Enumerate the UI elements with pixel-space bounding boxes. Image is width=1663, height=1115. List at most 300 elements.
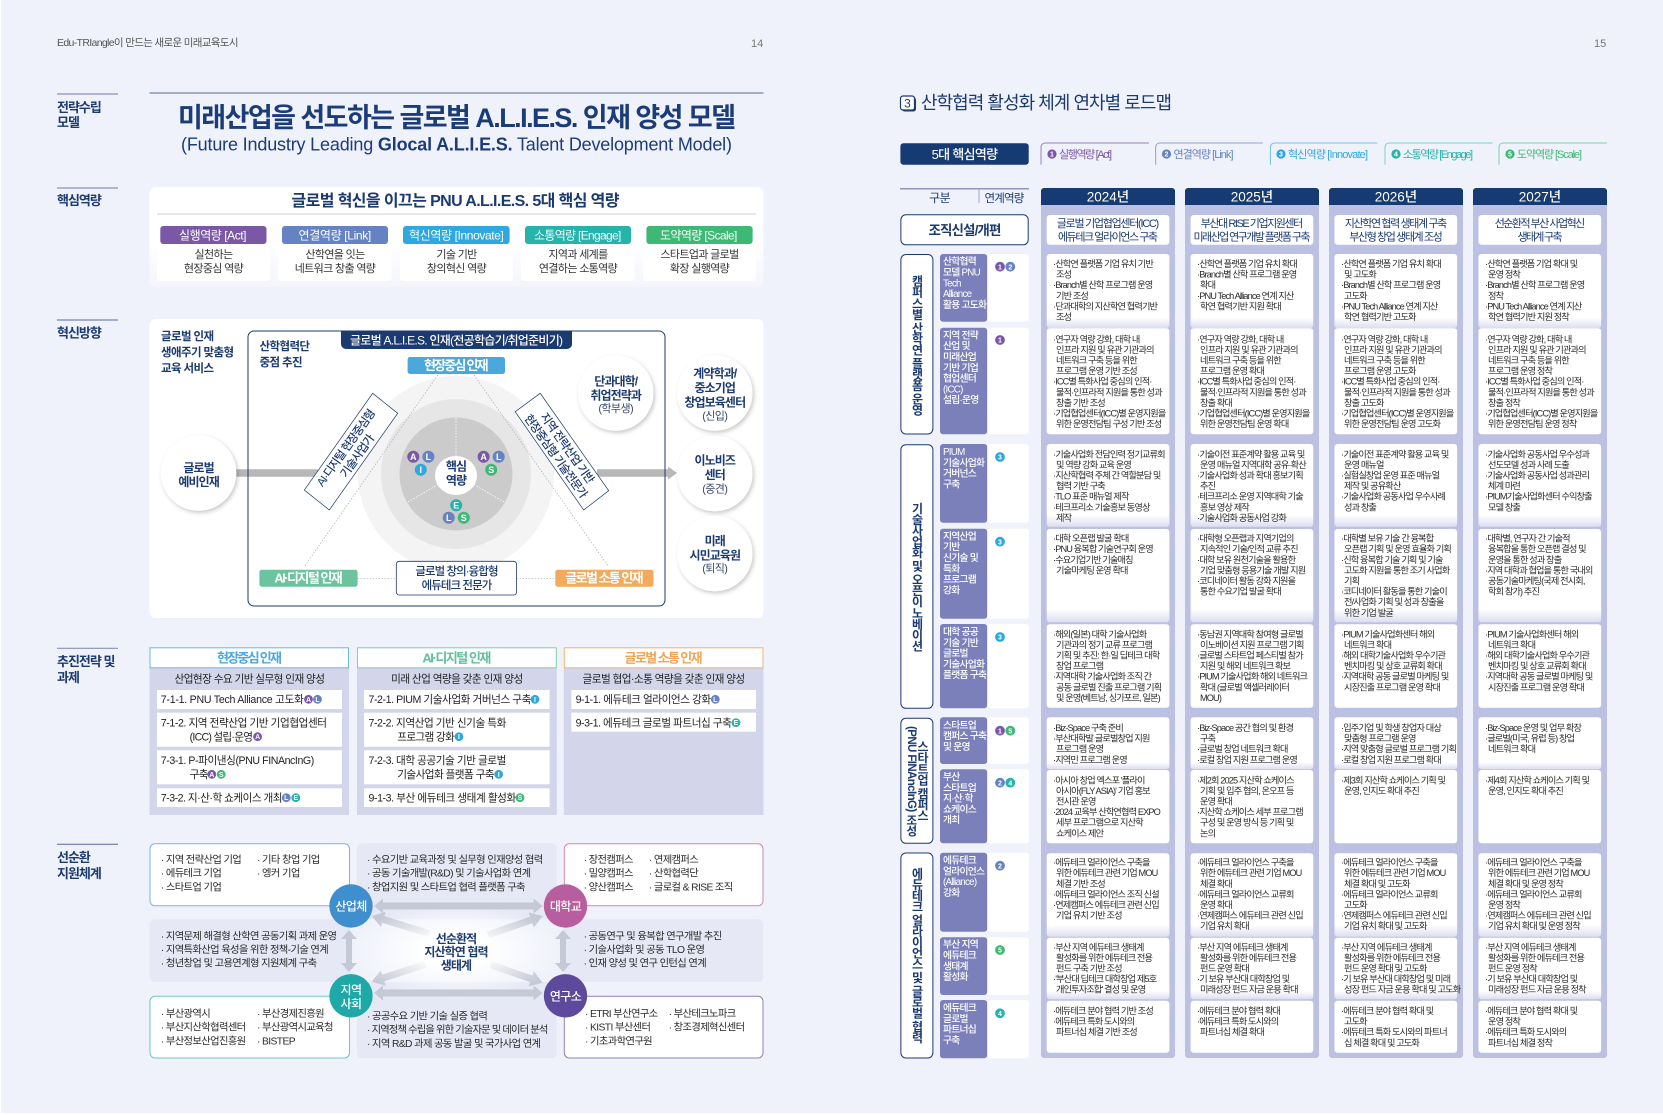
2025 plan [1191,624,1313,708]
task 9-1-3: S [518,795,523,802]
2027 plan: 물적·인프라적 지원을 통한 성과 [1488,386,1595,397]
circle: future citizen education [677,516,752,591]
letter badges: E L S: L [446,513,452,523]
2024 plan: 펀드 구축 기반 조성 [1056,964,1122,974]
box: industry members: · 스타트업 기업 [161,880,221,893]
category label: 구축 [943,1034,960,1046]
2024 plan: ·아시아 창업 엑스포 '플라이 [1053,775,1145,785]
2025 plan: ·PIUM 기술사업화 해외 네트워크 [1197,671,1308,682]
2025 plan: ·산학연 플랫폼 기업 유치 확대 [1197,259,1297,269]
flow arrow [236,469,318,477]
group: campus platform [901,254,933,434]
category label: 글로벌 [943,1013,969,1025]
2024 organisation: 글로벌 기업협업센터(ICC) [1057,217,1159,230]
pill: field-centred talent: 현장중심 인재 [424,358,489,373]
2025 plan: ·에듀테크 얼라이언스 구축을 [1197,858,1294,868]
2027 plan: ·에듀테크 얼라이언스 교류회 [1485,888,1582,899]
2027 plan: 위한 운영전담팀 운영 정착 [1488,418,1578,429]
2026 plan: 네트워크 구축 등을 위한 [1344,356,1426,366]
2026 plan: 학연 협력기반 고도화 [1344,311,1417,322]
task 7-2-3 [364,750,550,784]
box: university members: · 글로컬 & RISE 조직 [649,880,733,893]
task 7-1-2: A [255,734,260,741]
2026 plan: ·기 보유 부산대 대학창업 및 미래 [1341,973,1451,984]
2025 plan: ·대학형 오픈랩과 지역기업의 [1197,534,1294,544]
2025 plan: ·ICC별 특화사업 중심의 인적· [1197,376,1295,387]
panel: five core competencies [150,187,764,287]
category label: 플랫폼 구축 [943,669,987,681]
2026 plan: 십 체결 확대 및 고도화 [1344,1037,1420,1048]
table header: category: 연계역량 [984,192,1025,205]
2025 plan: 활성화를 위한 에듀테크 전용 [1200,952,1296,963]
circle: contract departments: 창업보육센터 [684,395,745,410]
2025 plan: ·동남권 지역대학 참여형 글로벌 [1197,629,1303,639]
2026 plan: ·Branch별 산학 프로그램 운영 [1341,279,1441,290]
category label: 개최 [943,814,960,826]
2027 plan: ·산학연 플랫폼 기업 확대 및 [1485,259,1577,269]
2025 column [1185,188,1319,1058]
competency: act: 실천하는 [195,247,233,261]
legend: innovate [1270,143,1378,165]
table header: category [900,189,1029,205]
competency badge [995,632,1005,642]
task 7-3-2: L [284,795,289,802]
2025 plan [1191,1001,1313,1053]
2024 plan [1047,444,1169,527]
2024 plan: 쇼케이스 제안 [1056,828,1105,838]
2025 plan: 논의 [1200,828,1216,838]
group: startup campus [901,718,933,843]
group: startup campus: (PNU FINAncInG) 조성 [905,726,917,836]
section label: core competency [57,188,118,208]
circle: innobiz centre [677,436,752,511]
task 7-3-1: 7-3-1. P-파이낸싱(PNU FINAncInG) [161,755,314,767]
2027 plan: 벤치마킹 및 상호 교류회 확대 [1488,660,1586,671]
2027 plan: ·ICC별 특화사업 중심의 인적· [1485,376,1583,387]
2024 plan: 아시아(FLY ASIA)' 기업 홍보 [1056,785,1150,796]
task 7-2-3: 7-2-3. 대학 공공기술 기반 글로벌 [368,755,506,767]
task 9-3-1: E [734,720,739,727]
box: university members: · 밀양캠퍼스 [584,868,633,880]
2027 plan: ·제4회 지산학 쇼케이스 기획 및 [1485,775,1589,785]
text: university-institute links: · 인재 양성 및 연구 인턴십 연계 [584,957,706,969]
2027 plan: 프로그램 운영 정착 [1488,365,1553,376]
circle: contract departments: 계약학과/ [693,367,736,381]
2027 plan: ·Branch별 산학 프로그램 운영 [1485,279,1585,290]
category label: 에듀테크 [943,950,977,962]
circle: global prospective talent [161,435,236,511]
category label: 특화 [943,563,960,575]
2025 plan: ·제2회 2025 지산학 쇼케이스 [1197,775,1294,785]
task 9-1-1: L [713,697,718,704]
2025 plan: 파트너십 체결 확대 [1200,1026,1264,1037]
2027 plan [1478,770,1601,843]
legend heading: 5대 핵심역량 [932,147,998,162]
legend: scale [1499,143,1607,165]
letter badges: A L S [478,451,505,476]
2026 organisation: 지산학연 협력 생태계 구축 [1345,217,1447,230]
box: university members: · 양산캠퍼스 [584,881,633,893]
diagonal card: AI digital entrepreneur: AI·디지털 현장중심형 [314,407,378,489]
competency: scale: 도약역량 [Scale] [660,227,737,242]
2025 plan: 물적·인프라적 지원을 통한 성과 [1200,386,1307,397]
text: university-institute links: · 공동연구 및 융복합 연구개발 추진 [584,932,722,943]
centre caption: 선순환적 [436,932,476,946]
2024 plan: ·지역민 프로그램 운영 [1053,754,1127,765]
box: research institutes [564,996,763,1058]
row: PIUM governance [940,444,1601,527]
2024 plan: ·에듀테크 얼라이언스 조직 신설 [1053,888,1159,899]
letter badges: E L S: S [461,513,467,523]
2026 plan: 기획 [1344,575,1360,586]
2025 plan: 확대 (글로벌 액셀러레이터 [1200,681,1289,692]
task 7-2-1: I [534,697,536,704]
row: ICC centre [940,328,1601,434]
2024 plan: ·에듀테크 특화 도시와의 [1053,1016,1135,1027]
2027 plan: ·PNU Tech Alliance 연계 지산 [1485,300,1583,311]
life-cycle service note: 교육 서비스 [161,362,215,375]
category label: 신기술 및 [943,552,979,564]
2025 organisation: 미래산업 연구개발 플랫폼 구축 [1194,231,1310,244]
2027 plan: ·에듀테크 얼라이언스 구축을 [1485,858,1582,868]
2027 plan: 네트워크 확대 [1488,639,1536,650]
2024 plan: ·ICC별 특화사업 중심의 인적· [1053,376,1151,387]
circle: colleges and careers [578,355,653,431]
concentric core circles [358,376,554,572]
category label [940,853,1029,932]
group: edutech alliance: 에듀테크 얼라이언스 및 글로벌 협력 [910,867,924,1044]
2024 organisation [1047,215,1169,245]
tab: global ALIES talent: 글로벌 A.L.I.E.S. 인재(전공학습기/취업준비기) [350,332,563,348]
2025 plan [1191,938,1313,999]
task 7-2-1 [364,690,550,709]
section label: virtuous cycle support: 선순환 [57,850,91,865]
2025 plan: ·로컬 창업 지원 프로그램 운영 [1197,754,1297,765]
2024 plan: 인프라 지원 및 유관 기관과의 [1056,344,1154,355]
task 9-1-3 [364,788,550,807]
2024 plan: ·2024 교육부 산학연협력 EXPO [1053,806,1161,817]
competency: link: 네트워크 창출 역량 [295,262,376,275]
2026 column: 2026년 [1375,190,1417,204]
box: university members [564,844,763,906]
panel heading: 글로벌 혁신을 이끄는 PNU A.L.I.E.S. 5대 핵심 역량 [292,191,620,210]
legend: link: 2 [1165,152,1169,159]
text: industry-community links: · 지역문제 해결형 산학연 공동기획 과제 운영 [161,932,336,943]
section label: strategy model [57,94,118,130]
2026 plan: ·부산 지역 에듀테크 생태계 [1341,942,1432,952]
2027 plan: 네트워크 확대 [1488,743,1536,754]
letter badges: A L I: I [420,465,422,475]
diagonal card: AI digital entrepreneur [304,393,398,510]
circle: colleges and careers: (학부생) [598,402,633,415]
2025 plan: 통한 수요기업 발굴 확대 [1200,586,1281,597]
task 7-3-1: 구축 [190,769,209,781]
2025 plan: ·지산학 쇼케이스 세부 프로그램 [1197,806,1303,817]
section label: strategy and tasks: 추진전략 및 [57,654,115,669]
2024 plan: ·Branch별 산학 프로그램 운영 [1053,279,1153,290]
2025 plan [1191,717,1313,769]
2027 plan: 파트너십 체결 정착 [1488,1038,1553,1048]
2025 plan: 홍보 영상 제작 [1200,501,1250,512]
category label [940,624,1029,708]
2025 plan: 이노베이션 지원 프로그램 기획 [1200,639,1304,650]
box: industry members: · 엥커 기업 [257,866,300,880]
2025 plan: ·연구자 역량 강화, 대학 내 [1197,334,1283,344]
category label [940,328,1029,434]
task 7-2-2: 프로그램 강화 [397,732,455,744]
2025 organisation [1191,215,1313,245]
letter badges: A L I: A [410,452,417,462]
2024 plan: ·TLO 표준 매뉴얼 제작 [1053,492,1130,502]
category label [940,529,1029,619]
legend: engage [1385,143,1493,165]
centre glow [351,903,561,999]
row: edutech global partnership [940,1000,1601,1058]
two-way arrows [341,898,571,1000]
2027 plan: 공동기술마케팅(국제 전시회, [1488,576,1585,586]
2025 plan: 운영 확대 [1200,796,1232,806]
circle: contract departments [677,355,752,431]
2027 plan: ·기술사업화 공동사업 우수성과 [1485,449,1589,459]
virtuous cycle ecosystem diagram [150,843,764,1058]
letter badges: A L S: A [480,452,487,462]
2027 plan: ·대학별, 연구자 간 기술적 [1485,534,1570,544]
category label [940,937,1029,995]
2026 plan: 창출 고도화 [1344,398,1385,408]
circle: innobiz centre: 센터 [705,468,725,482]
2025 plan: 기업 유치 확대 [1200,920,1249,931]
section label: virtuous cycle support [57,844,118,881]
2024 plan: 및 역량 강화 교육 운영 [1056,459,1131,470]
legend: link: 연결역량 [Link] [1174,148,1234,161]
box: industry members: · 에듀테크 기업 [161,866,221,880]
node: institute [544,974,587,1018]
diagonal card: regional tech expert: 현장중심형 기술전문가 [521,412,591,501]
2026 organisation [1334,215,1457,245]
2026 plan: ·해외 대학기술사업화 우수기관 [1341,650,1447,660]
2024 plan [1047,328,1169,434]
2026 plan [1334,254,1457,328]
section label: innovation direction: 혁신방향 [57,326,102,340]
task 7-3-2: E [293,795,298,802]
2027 plan: ·PIUM 기술사업화센터 해외 [1485,629,1578,639]
task 9-1-1 [571,690,756,709]
node: institute: 연구소 [550,989,582,1003]
legend: scale: 도약역량 [Scale] [1517,147,1582,161]
2027 plan: 체결 확대 및 운영 정착 [1488,878,1564,889]
2024 column: 2024년 [1087,190,1129,204]
task 7-1-1: 7-1-1. PNU Tech Alliance 고도화 [161,694,304,706]
2024 plan: 프로그램 운영 [1056,743,1104,754]
2027 plan: ·연구자 역량 강화, 대학 내 [1485,334,1571,344]
2024 plan: 전시관 운영 [1056,796,1096,806]
2026 plan: 운영, 인지도 확대 추진 [1344,785,1419,796]
2026 plan: ·에듀테크 얼라이언스 교류회 [1341,888,1438,899]
competency: scale: 확장 실행역량 [670,262,730,275]
2026 plan [1334,328,1457,434]
category label [940,769,1029,843]
category label: 거버넌스 [943,468,977,480]
2025 plan: 지속적인 기술/인적 교류 추진 [1200,543,1298,554]
2026 plan: 물적·인프라적 지원을 통한 성과 [1344,386,1451,397]
2026 plan: ·신학 융복합 기술 기획 및 기술 [1341,554,1443,565]
competency badges: 1 [998,264,1002,271]
pill: AI digital talent [259,570,358,587]
competency: innovate: 혁신역량 [Innovate] [409,228,504,242]
task 7-1-1 [157,690,342,709]
box: industry members: · 기타 창업 기업 [257,855,320,866]
category label: 기술사업화 [943,456,985,469]
box: community members: · 부산광역시교육청 [257,1022,333,1034]
box: community members: · 부산지산학협력센터 [161,1020,246,1034]
column: AI digital talent: 미래 산업 역량을 갖춘 인재 양성 [391,672,523,686]
group: tech commercialisation: 기술사업화 및 오픈이노베이션 [910,501,924,651]
2024 plan: 위한 에듀테크 관련 기업 MOU [1056,867,1158,878]
competency: engage: 연결하는 소통역량 [539,261,618,275]
2026 plan: ·입주기업 및 학생 창업자 대상 [1341,723,1441,733]
2026 plan: 고도화 [1344,291,1368,301]
box: community members [150,996,350,1058]
competency badge [995,945,1005,955]
2025 plan [1191,770,1313,843]
section label: strategy model: 전략수립 [57,100,101,115]
2025 column: 2025년 [1231,190,1273,204]
text: industry-community links: · 청년창업 및 고용연계형 지원체계 구축 [161,956,317,969]
2026 plan: 인프라 지원 및 유관 기관과의 [1344,344,1442,355]
2025 plan: 기획 및 입주 협의, 온오프 등 [1200,785,1294,796]
2025 plan: ·기술사업화 성과 확대 홍보기획 [1197,470,1303,480]
2026 plan: ·연구자 역량 강화, 대학 내 [1341,334,1427,344]
2027 plan: ·에듀테크 특화 도시와의 [1485,1026,1567,1037]
2024 plan: ·에듀테크 분야 협력 기반 조성 [1053,1006,1153,1016]
letter badges: E L S [443,499,470,524]
2024 plan: ·PNU 융복합 기술연구회 운영 [1053,544,1153,554]
2026 plan: 성장 펀드 자금 운용 확대 및 고도화 [1344,984,1462,995]
2027 plan: ·기 보유 부산대 대학창업 및 [1485,973,1578,984]
competency badge: 5 [998,948,1002,955]
2025 plan: ·기술사업화 공동사업 강화 [1197,512,1287,523]
group: campus platform: 캠퍼스별 산학연 플랫폼 운영 [910,275,924,415]
2025 plan: ·Branch별 산학 프로그램 운영 [1197,269,1297,280]
2024 plan [1047,770,1169,843]
2027 plan: 학회 참가) 추진 [1488,587,1539,597]
category label: 스타트업 [943,781,976,794]
2024 plan: ·해외(일본) 대학 기술사업화 [1053,629,1146,639]
row: startup showcase [940,769,1601,843]
task 7-3-1: A [209,772,214,779]
row: edutech ecosystem [940,937,1601,999]
2024 plan: 기획 및 추진: 한·일 딥테크 대학 [1056,650,1161,660]
section label: strategy and tasks: 과제 [57,670,79,685]
task 9-3-1 [571,713,756,732]
box: industry members: · 지역 전략산업 기업 [161,855,241,866]
2024 plan: ·대학 오픈랩 발굴 확대 [1053,534,1128,544]
competency badge: 3 [998,455,1002,462]
2026 plan: ·코디네이터 활동을 통한 기술이 [1341,586,1447,597]
task 7-2-2 [364,713,550,747]
competency badges: 1 [998,728,1002,735]
2026 plan: 및 고도화 [1344,269,1377,280]
2026 plan [1334,1001,1457,1053]
competency badge: 4 [998,1011,1002,1018]
competency: innovate: 창의혁신 역량 [427,262,487,275]
category label [940,1000,1029,1058]
page number 15: 15 [1594,38,1606,50]
competency: scale: 스타트업과 글로벌 [660,248,739,261]
2027 plan: 학연 협력기반 지원 정착 [1488,311,1570,322]
2027 plan [1478,1001,1601,1053]
2027 plan [1478,529,1601,622]
organisation label [901,215,1028,245]
2025 plan: ·부산 지역 에듀테크 생태계 [1197,942,1288,952]
2024 plan [1047,938,1169,999]
competency: link: 산학연을 잇는 [305,248,365,261]
2024 plan: ·Biz-Space 구축 준비 [1053,723,1123,733]
2026 plan: 고도화 지원을 통한 조기 사업화 [1344,564,1451,575]
competency badge [995,537,1005,547]
2025 plan: ·에듀테크 특화 도시와의 [1197,1016,1279,1027]
organisation label: 조직신설/개편 [929,223,1001,238]
legend heading [900,143,1029,165]
node: university: 대학교 [550,898,582,914]
circle: future citizen education: 미래 [705,534,725,548]
diagonal card: AI digital entrepreneur: 기술사업가 [338,432,378,480]
letter badges: A L I [407,451,434,476]
box: research institutes: · 기초과학연구원 [585,1035,652,1047]
competency badges: 4 [1008,780,1012,787]
2026 plan: 기업 유치 확대 및 고도화 [1344,920,1428,931]
task 7-2-2: 7-2-2. 지역산업 기반 신기술 특화 [368,717,507,730]
main title: (Future Industry Leading Glocal A.L.I.E.S. Talent Development Model) [181,134,732,154]
competency badge [995,452,1005,462]
2027 plan: ·연제캠퍼스 에듀테크 관련 신입 [1485,910,1591,921]
category label: 산업 및 [943,339,970,352]
box: community members: · 부산정보산업진흥원 [161,1034,246,1047]
2024 plan: 세부 프로그램으로 지산학 [1056,817,1144,828]
2025 plan: ·기술이전 표준계약 활용 교육 및 [1197,449,1304,459]
2025 plan: ·연제캠퍼스 에듀테크 관련 신입 [1197,910,1303,921]
2026 plan: ·대학별 보유 기술 간 융복합 [1341,534,1433,544]
2027 plan: 활성화를 위한 에듀테크 전용 [1488,952,1584,963]
2024 plan: ·단과대학의 지산학연 협력기반 [1053,300,1159,311]
box: research institutes: · 부산테크노파크 [669,1009,736,1020]
competency badge [995,1008,1005,1018]
text: industry-community links: · 지역특화산업 육성을 위한 정책-기술 연계 [161,943,328,956]
box: research institutes: · KISTI 부산센터 [585,1022,650,1034]
2025 plan: ·글로벌 스타트업 페스티벌 참가 [1197,650,1304,660]
2027 plan: 선도모델 성과 사례 도출 [1488,459,1569,470]
category label [940,254,1029,322]
2024 plan: ·기업협업센터(ICC)별 운영지원을 [1053,408,1166,418]
2024 plan: 조성 [1056,312,1072,322]
category label: 지역산업 [943,531,976,542]
2025 plan: 지원 및 해외 네트워크 확보 [1200,660,1291,671]
2024 plan: 창업 프로그램 [1056,660,1104,671]
diagonal card: regional tech expert [515,393,609,510]
2027 plan: 정착 [1488,291,1505,301]
2026 plan: 체결 확대 및 고도화 [1344,878,1411,889]
category label: 파트너십 [943,1024,976,1036]
2027 plan: ·에듀테크 분야 협력 확대 및 [1485,1006,1577,1016]
text: industry-university links: · 창업지원 및 스타트업 협력 플랫폼 구축 [367,880,525,893]
2026 plan: ·PNU Tech Alliance 연계 지산 [1341,300,1439,311]
2024 plan: ·기술사업화 전담인력 정기교류회 [1053,449,1165,459]
2024 plan: ·테크프리소 기술홍보 동영상 [1053,501,1151,512]
2025 plan: 추진 [1200,481,1216,491]
2027 plan: ·기업협업센터(ICC)별 운영지원을 [1485,408,1598,418]
2026 plan: ·기술사업화 공동사업 우수사례 [1341,491,1446,502]
2025 plan: MOU) [1200,693,1222,703]
